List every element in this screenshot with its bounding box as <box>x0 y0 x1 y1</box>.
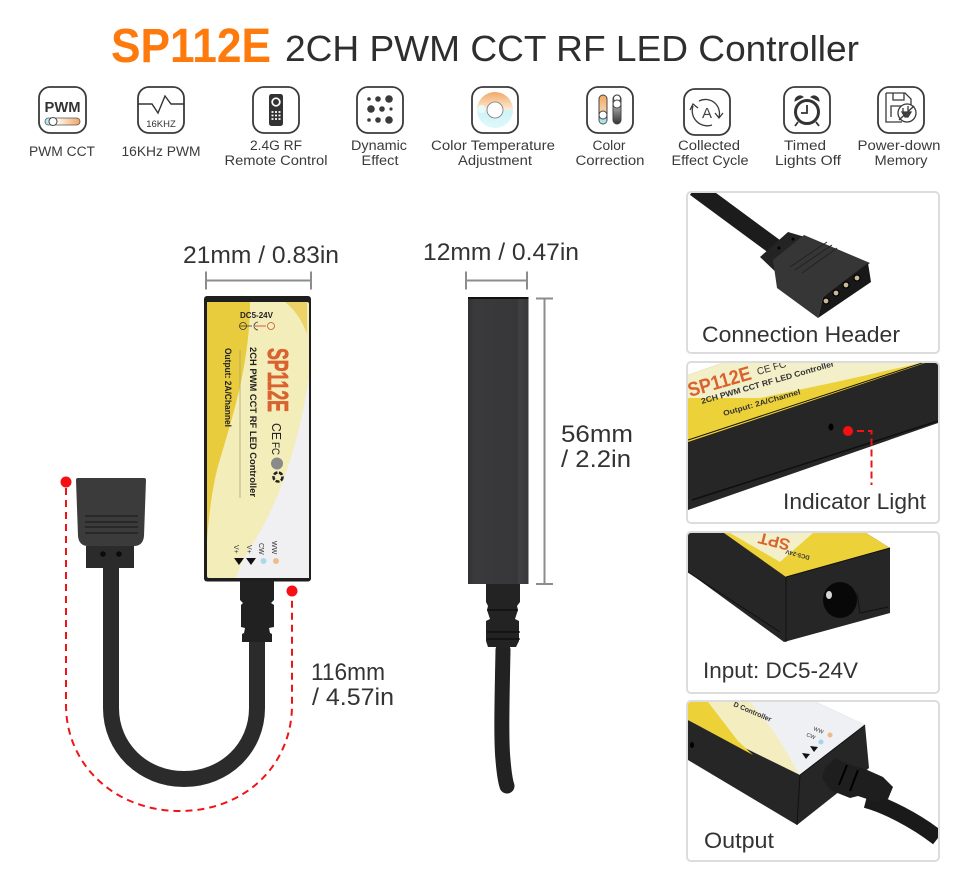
feature: color temperature adjustment: Color Temperature <box>431 138 555 153</box>
feature: 2.4G RF remote control: 2.4G RF <box>250 138 302 153</box>
cable loop <box>111 565 257 779</box>
label sticker: Output: 2A/Channel <box>223 348 233 427</box>
controller housing <box>204 296 311 582</box>
feature: color temperature adjustment <box>431 87 555 168</box>
controller top view with cable <box>76 296 311 779</box>
width dimension: side view: 12mm / 0.47in <box>423 239 579 266</box>
feature: 2.4G RF remote control <box>224 87 328 168</box>
feature: 2.4G RF remote control: Remote Control <box>224 153 328 168</box>
feature: collected effect cycle: Effect Cycle <box>672 153 748 168</box>
controller side photo <box>685 359 938 510</box>
DC jack photo: SPT <box>757 528 792 553</box>
feature: color temperature adjustment: Adjustment <box>458 153 532 168</box>
controller side photo: 2CH PWM CCT RF LED Controller <box>700 359 835 406</box>
feature: power-down memory: Power-down <box>858 138 940 153</box>
label sticker: FC <box>269 442 281 455</box>
label sticker: CW <box>257 543 264 555</box>
width dimension: top view <box>183 242 339 290</box>
feature: collected effect cycle: A <box>702 105 712 122</box>
height dimension <box>536 298 633 584</box>
feature: PWM CCT <box>29 87 95 159</box>
feature: timed lights off <box>775 87 841 168</box>
feature: 16KHz PWM <box>122 87 200 159</box>
feature: 16KHz PWM: 16KHZ <box>146 119 176 130</box>
cable length dimension <box>60 476 394 811</box>
label sticker: 2CH PWM CCT RF LED Controller <box>247 347 258 497</box>
feature: color correction: Color <box>592 138 626 153</box>
output photo <box>688 701 938 838</box>
indicator callout <box>843 426 872 485</box>
feature: PWM CCT: PWM <box>44 100 80 116</box>
cable length dimension: / 4.57in <box>312 684 394 711</box>
label sticker: V+ <box>245 545 252 554</box>
strain relief <box>240 581 274 642</box>
label sticker <box>207 302 309 578</box>
feature: timed lights off: Timed <box>784 138 826 153</box>
label sticker: WW <box>270 541 277 555</box>
panel: output: Output <box>704 828 775 853</box>
panel: connection header <box>687 188 939 353</box>
label sticker: SP112E <box>261 348 293 412</box>
feature: dynamic effect: Dynamic <box>351 138 407 153</box>
label sticker: V+ <box>232 545 239 554</box>
feature: color correction: Correction <box>576 153 644 168</box>
panel: indicator light <box>685 359 939 523</box>
width dimension: top view: 21mm / 0.83in <box>183 242 339 269</box>
feature: 16KHz PWM: 16KHz PWM <box>122 144 200 159</box>
feature: dynamic effect: Effect <box>362 153 399 168</box>
feature: power-down memory: Memory <box>874 153 928 168</box>
feature: timed lights off: Lights Off <box>775 153 841 168</box>
DC jack photo: DC5-24V <box>785 548 811 560</box>
feature: collected effect cycle: Collected <box>678 138 740 153</box>
title <box>111 20 859 73</box>
connector plug <box>76 478 146 568</box>
controller side photo: SP112E <box>685 363 754 402</box>
title: 2CH PWM CCT RF LED Controller <box>285 28 859 69</box>
DC jack photo <box>688 528 890 642</box>
output photo: D Controller <box>732 701 772 724</box>
feature: PWM CCT: PWM CCT <box>29 144 95 159</box>
connector photo <box>695 188 871 318</box>
cable length dimension: 116mm <box>311 659 385 686</box>
panel: indicator light: Indicator Light <box>783 489 927 514</box>
feature: power-down memory <box>858 87 940 168</box>
feature: color correction <box>576 87 644 168</box>
panel: input DC5-24V <box>687 528 939 693</box>
controller side view with cable <box>468 297 528 786</box>
output photo: WW <box>812 726 825 736</box>
panel: input DC5-24V: Input: DC5-24V <box>703 658 858 683</box>
controller side photo: CE FC <box>756 359 788 378</box>
label sticker: CE <box>269 423 284 440</box>
panel: output <box>687 701 939 861</box>
panel: connection header: Connection Header <box>702 322 901 347</box>
feature: collected effect cycle <box>672 89 748 168</box>
title: SP112E <box>111 20 271 73</box>
output photo: CW <box>805 732 817 742</box>
label sticker: DC5-24V <box>240 311 274 320</box>
controller side photo: Output: 2A/Channel <box>722 387 801 418</box>
feature: dynamic effect <box>351 87 407 168</box>
height dimension: / 2.2in <box>561 446 631 473</box>
height dimension: 56mm <box>561 421 633 448</box>
width dimension: side view <box>423 239 579 290</box>
